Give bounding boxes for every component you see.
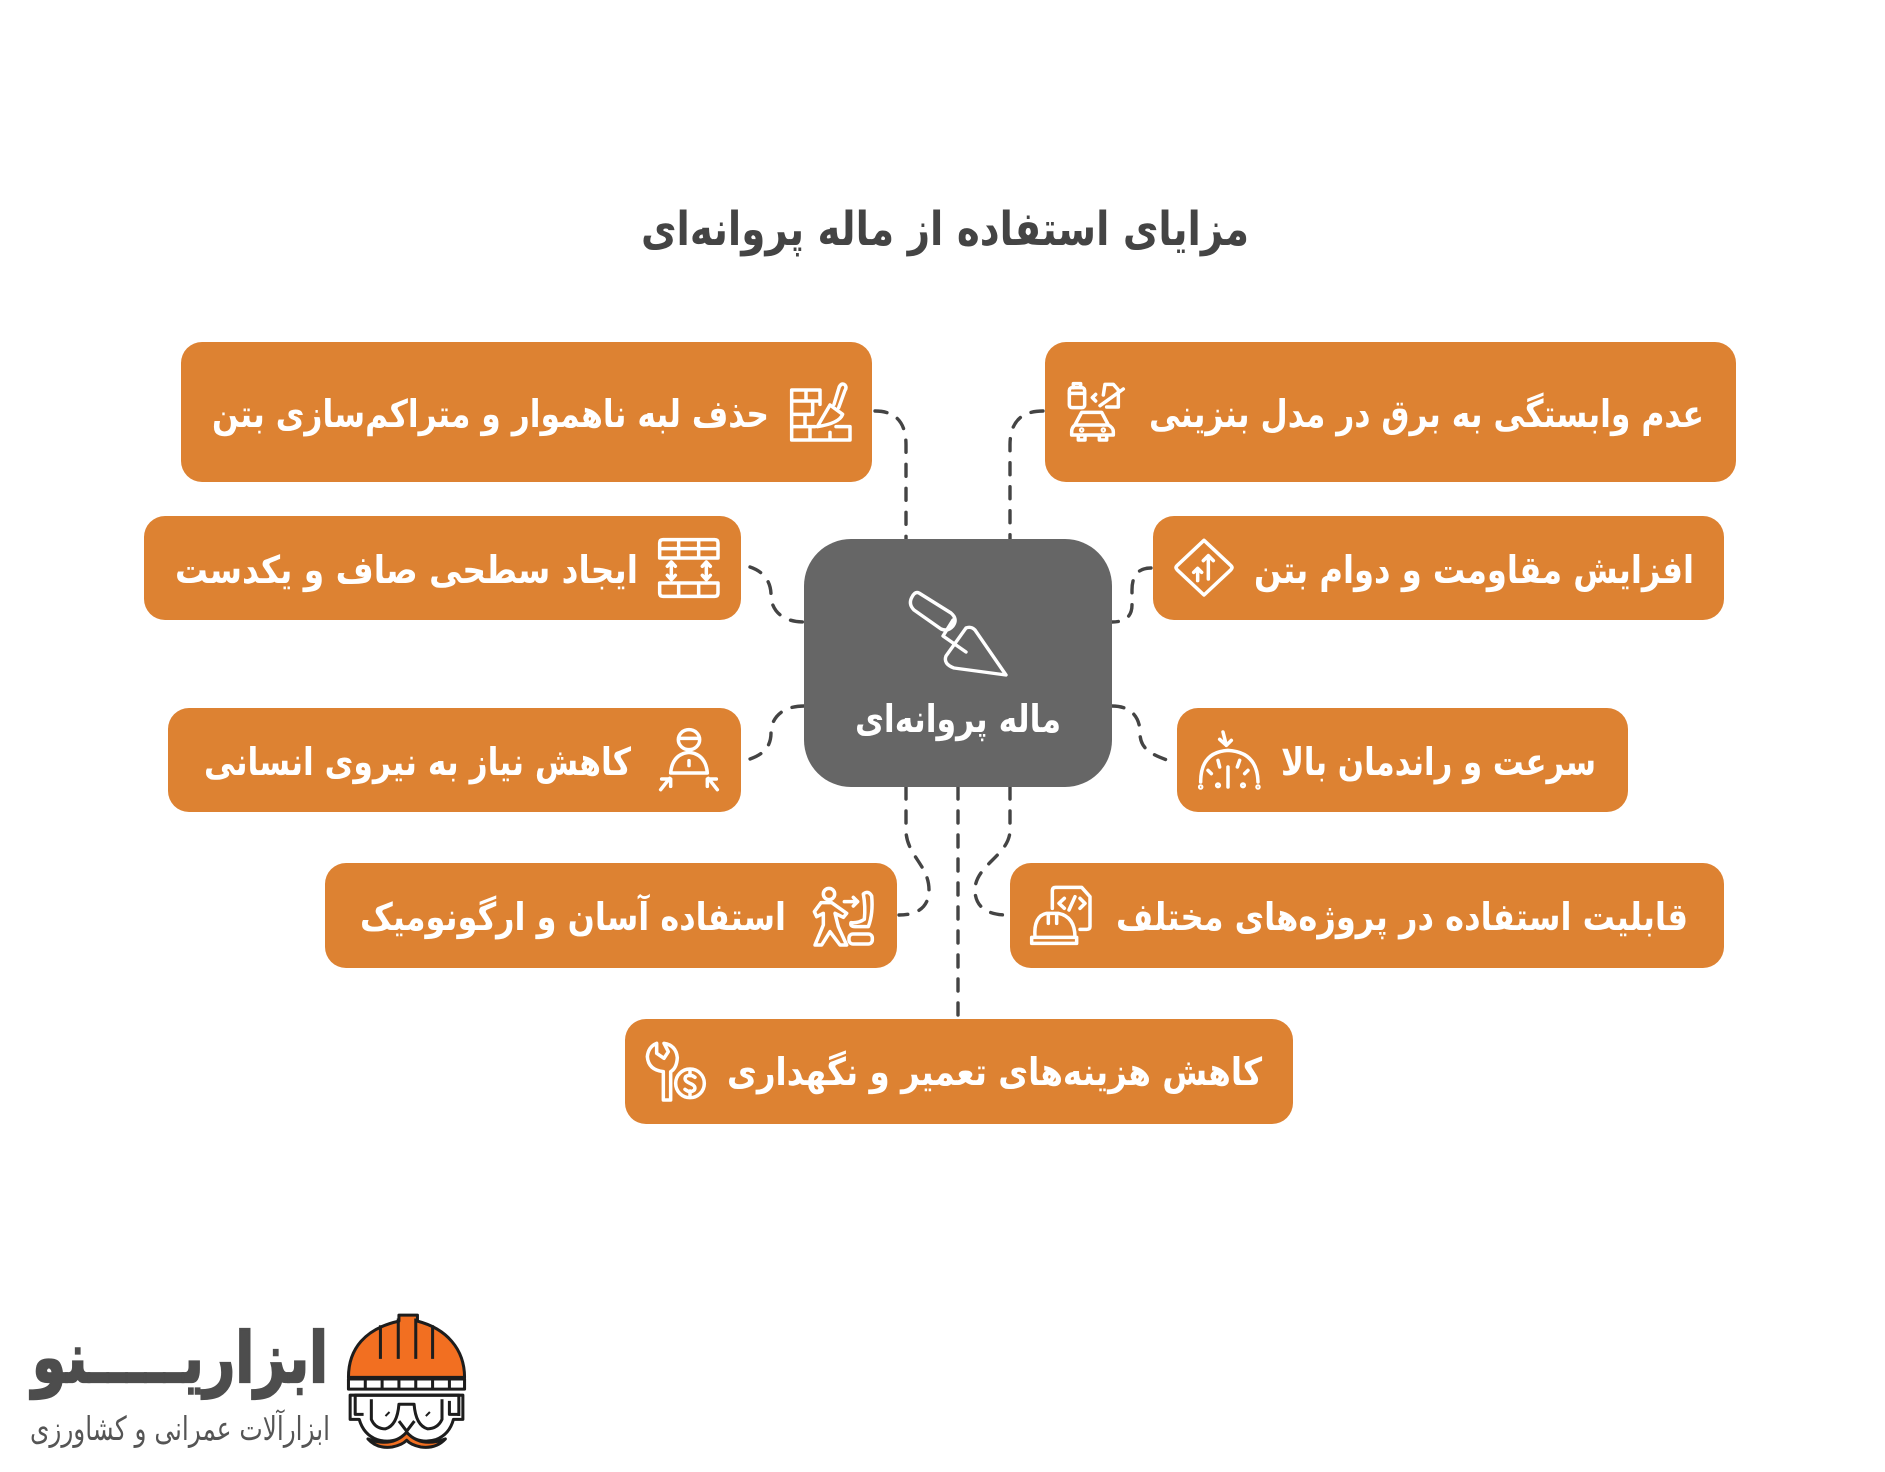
panel: remove rough edges: حذف لبه ناهموار و متراکم‌سازی بتن (212, 392, 769, 437)
icon: trowel (910, 592, 1006, 675)
icon: diamond sign with arrows (1176, 540, 1232, 595)
panel: strength and durability (1153, 516, 1724, 620)
panel: less manpower (168, 708, 741, 812)
icon: worker with arrows (661, 730, 717, 790)
panel: high speed: سرعت و راندمان بالا (1281, 740, 1596, 785)
icon: brick wall and trowel (792, 384, 850, 440)
icon: person walking to seat (814, 888, 872, 945)
panel: various projects: قابلیت استفاده در پروژه‌های مختلف (1116, 895, 1688, 940)
title: مزایای استفاده از ماله پروانه‌ای (641, 202, 1249, 257)
panel: centre node: ماله پروانه‌ای (855, 697, 1061, 742)
icon: gauge (1200, 732, 1259, 788)
logo (30, 1315, 465, 1448)
icon: document and hard hat (1032, 887, 1090, 943)
panel: smooth surface (144, 516, 741, 620)
icon: grid and arrows (660, 540, 718, 596)
panel: strength and durability: افزایش مقاومت و دوام بتن (1254, 548, 1694, 593)
logo helmet (348, 1315, 465, 1447)
icon: wrench and dollar (647, 1043, 704, 1100)
panel: less manpower: کاهش نیاز به نیروی انسانی (204, 740, 632, 785)
panel: remove rough edges (181, 342, 872, 482)
panel: smooth surface: ایجاد سطحی صاف و یکدست (175, 548, 638, 593)
icon: fuel cans and car (1069, 384, 1123, 440)
panel: independent of electricity (1045, 342, 1736, 482)
logo wordmark: ابزاریـــــنو (30, 1317, 328, 1399)
logo tagline: ابزارآلات عمرانی و کشاورزی (30, 1409, 330, 1448)
panel: high speed (1177, 708, 1628, 812)
connectors (750, 411, 1167, 1019)
panel: lower maintenance costs: کاهش هزینه‌های تعمیر و نگهداری (727, 1050, 1263, 1095)
panel: centre node (804, 539, 1112, 787)
panel: ergonomic: استفاده آسان و ارگونومیک (360, 893, 786, 940)
panel: ergonomic (325, 863, 897, 968)
panel: independent of electricity: عدم وابستگی به برق در مدل بنزینی (1149, 392, 1704, 437)
panel: lower maintenance costs (625, 1019, 1293, 1124)
panel: various projects (1010, 863, 1724, 968)
